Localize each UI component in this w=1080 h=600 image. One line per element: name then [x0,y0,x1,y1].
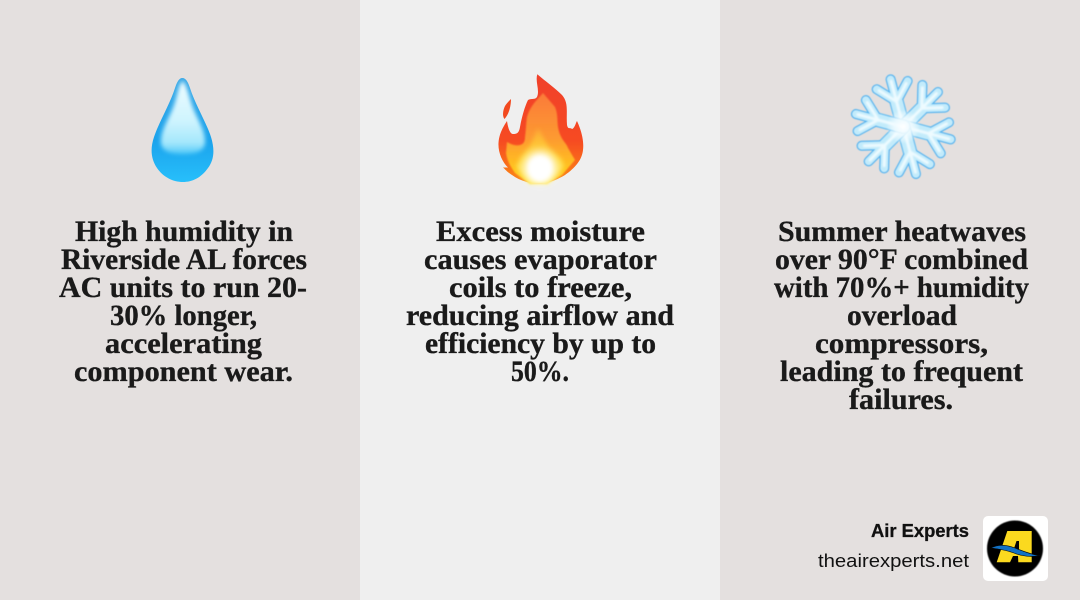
text block: heatwaves: compressors, [815,327,988,360]
text block: heatwaves [774,215,1029,416]
icon: snowflake [852,75,955,178]
text block: heatwaves: with 70%+ humidity [774,271,1029,304]
text block: moisture: causes evaporator [424,243,657,276]
text block: moisture: 50%. [511,355,569,388]
text block: heatwaves: leading to frequent [780,355,1023,388]
text block: moisture: coils to freeze, [449,271,632,304]
text block: humidity: High humidity in [75,215,293,248]
text block: heatwaves: Summer heatwaves [778,215,1026,248]
text block: humidity: 30% longer, [110,299,257,332]
panel: heatwaves [720,0,1080,600]
text block: moisture: efficiency by up to [425,327,656,360]
logo [983,516,1048,581]
icon: water drop [152,78,213,182]
website: theairexperts.net [818,551,969,571]
text block: heatwaves: overload [847,299,957,332]
text block: humidity [59,215,307,388]
text block: heatwaves: failures. [849,383,953,416]
icon: flame [498,74,583,184]
text block: humidity: component wear. [74,355,293,388]
text block: moisture [406,215,674,388]
panel: humidity [0,0,360,600]
text block: heatwaves: over 90°F combined [775,243,1028,276]
brand name: Air Experts [871,521,969,541]
text block: moisture: Excess moisture [436,215,645,248]
text block: moisture: reducing airflow and [406,299,674,332]
panel: moisture [360,0,720,600]
text block: humidity: accelerating [105,327,262,360]
text block: humidity: AC units to run 20- [59,271,307,304]
text block: humidity: Riverside AL forces [61,243,307,276]
